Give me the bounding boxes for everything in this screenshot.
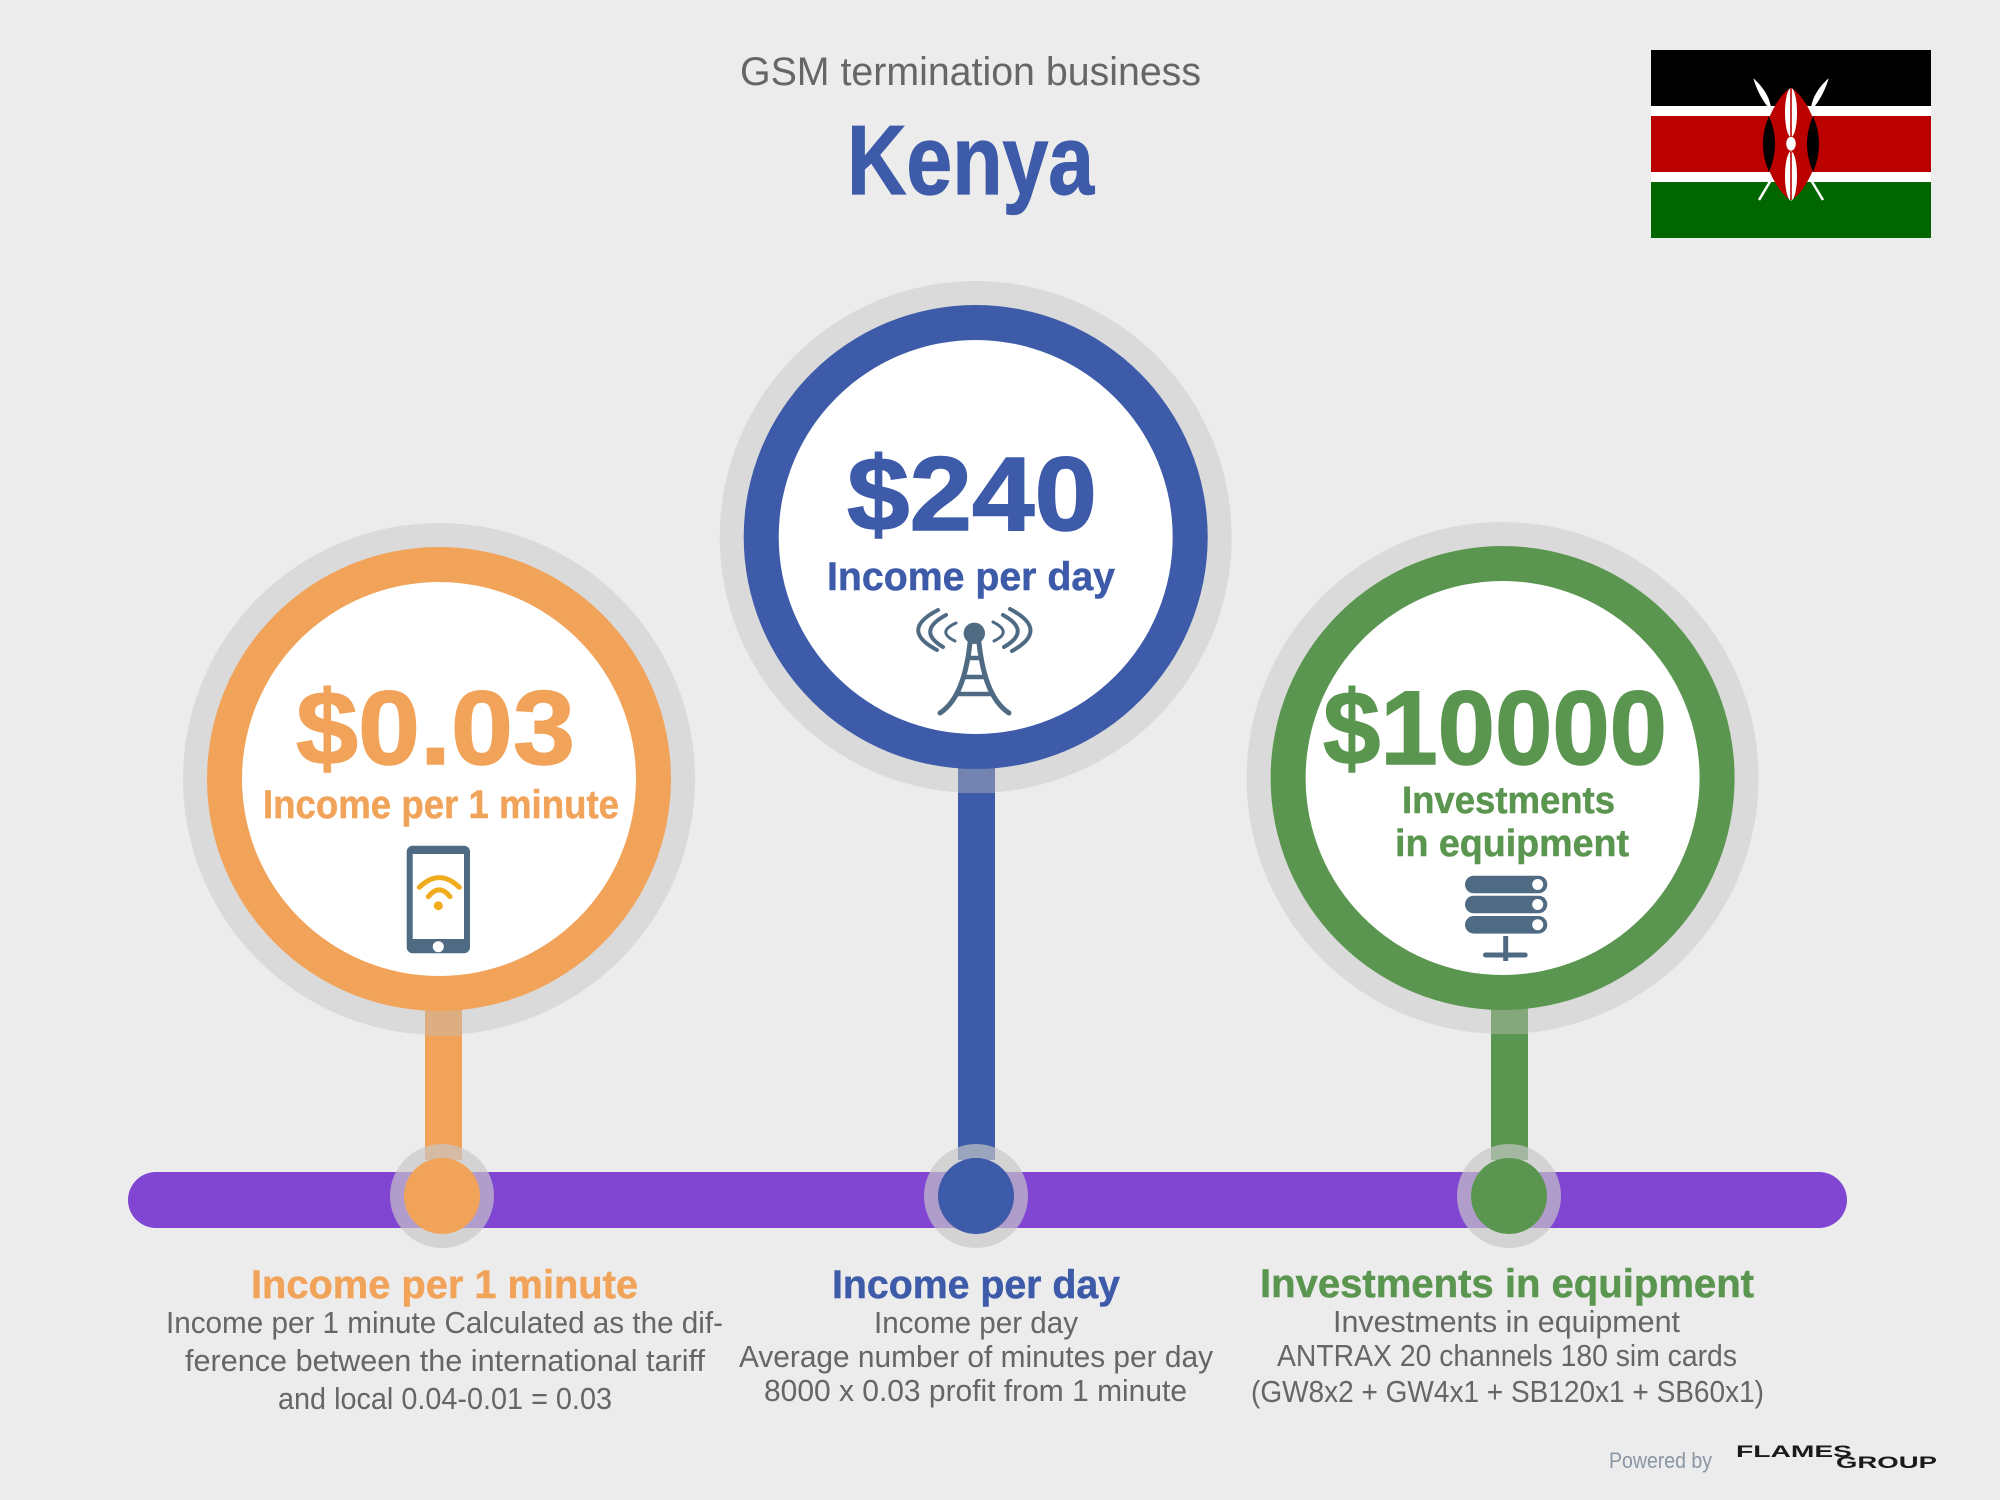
- footer: powered by: Powered by: [1609, 1448, 1712, 1473]
- heading: Income per 1 minute: [251, 1263, 638, 1307]
- text block: investments in equipment: Investments in equipment: [1333, 1304, 1680, 1339]
- footer: logo: FLAMES: [1736, 1442, 1852, 1461]
- text block: income per 1 minute: Income per 1 minute Calculated as the dif-: [166, 1305, 723, 1340]
- text block: income per 1 minute: and local 0.04-0.01 = 0.03: [278, 1381, 612, 1416]
- node: blue: [924, 1144, 1028, 1248]
- timeline bar: [128, 1172, 1847, 1228]
- value: $0.03: [296, 670, 575, 787]
- panel: income per 1 minute: [183, 523, 695, 1160]
- label line 2: in equipment: [1395, 823, 1629, 865]
- text block: investments in equipment: (GW8x2 + GW4x1 + SB120x1 + SB60x1): [1251, 1374, 1764, 1409]
- label: Investments: [1402, 780, 1615, 822]
- heading: Income per day: [832, 1263, 1121, 1307]
- icon: Kenya flag: [1651, 50, 1931, 238]
- node: green: [1457, 1144, 1561, 1248]
- icon: phone with wifi: [407, 846, 470, 953]
- footer: logo: GROUP: [1836, 1453, 1937, 1472]
- text block: investments in equipment: [1251, 1262, 1764, 1409]
- text block: income per day: 8000 x 0.03 profit from 1 minute: [764, 1373, 1187, 1408]
- subtitle: GSM termination business: [740, 50, 1201, 94]
- label: Income per 1 minute: [263, 783, 619, 827]
- text block: income per day: Income per day: [874, 1305, 1078, 1340]
- circle: blue ring with stem: [720, 281, 1232, 1160]
- icon: server: [1465, 876, 1547, 961]
- text block: income per 1 minute: ference between the international tariff: [185, 1343, 705, 1378]
- text block: income per 1 minute: [166, 1263, 723, 1416]
- node: orange: [390, 1144, 494, 1248]
- text block: income per day: [739, 1263, 1213, 1408]
- circle: orange ring with stem: [183, 523, 695, 1160]
- circle: green ring with stem: [1247, 522, 1759, 1160]
- value: $10000: [1323, 670, 1667, 787]
- label: Income per day: [827, 555, 1116, 599]
- text block: investments in equipment: ANTRAX 20 channels 180 sim cards: [1277, 1338, 1737, 1373]
- panel: investments in equipment: [1247, 522, 1759, 1160]
- title: Kenya: [847, 105, 1095, 215]
- text block: income per day: Average number of minutes per day: [739, 1339, 1213, 1374]
- icon: radio tower: [918, 609, 1031, 713]
- heading: Investments in equipment: [1260, 1262, 1754, 1306]
- panel: income per day: [720, 281, 1232, 1160]
- value: $240: [847, 436, 1097, 553]
- footer: logo: [1736, 1442, 1937, 1472]
